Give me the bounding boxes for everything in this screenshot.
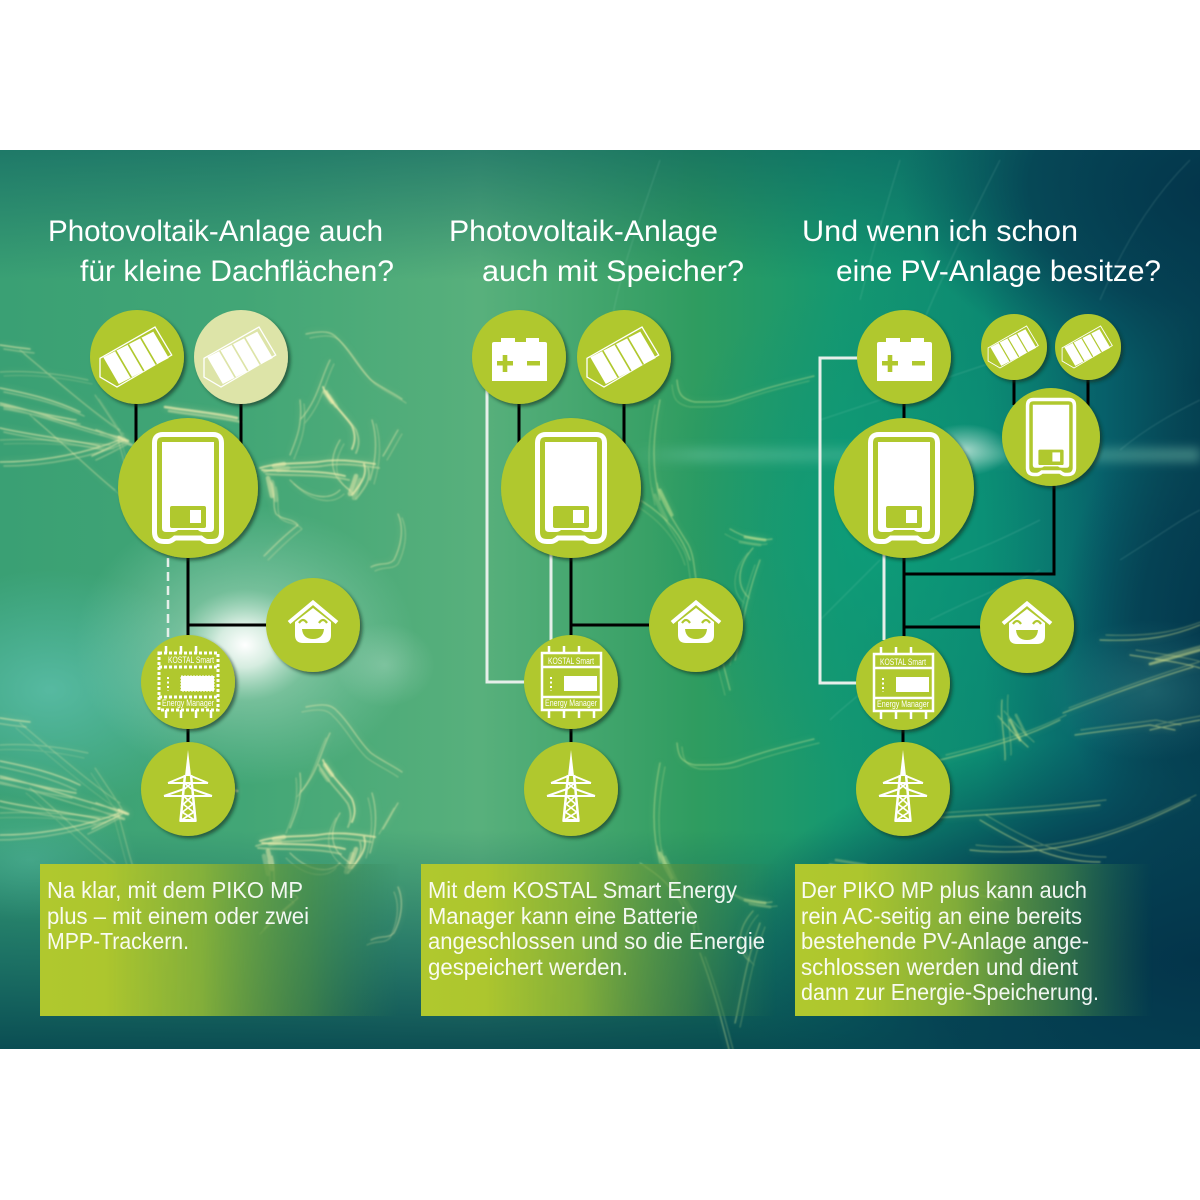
icon: battery — [472, 310, 566, 404]
icon: small existing inverter — [1002, 388, 1100, 486]
icon: optional energy manager: Energy Manager — [162, 698, 214, 708]
text box: column 3: Der PIKO MP plus kann auch — [801, 877, 1087, 903]
heading: column 2 — [449, 215, 744, 288]
icon: happy home — [649, 578, 743, 672]
icon: small solar panel A — [981, 314, 1047, 380]
light wisps — [0, 160, 1200, 1057]
text box: column 1: Na klar, mit dem PIKO MP — [47, 877, 303, 903]
icon: battery — [857, 310, 951, 404]
icon: solar panel — [90, 310, 184, 404]
icon: energy manager — [524, 635, 618, 729]
icon: inverter — [118, 418, 258, 558]
icon: happy home — [266, 578, 360, 672]
text box: column 3: schlossen werden und dient — [801, 954, 1079, 980]
icon: small solar panel B — [1055, 314, 1121, 380]
diagram: column 2 — [472, 310, 743, 836]
icon: power pylon — [141, 742, 235, 836]
connectors column 3 — [820, 358, 1088, 745]
diagram: column 1 — [90, 310, 360, 836]
icon: energy manager: Energy Manager — [877, 699, 929, 709]
text box: column 1: MPP-Trackern. — [47, 928, 189, 954]
diagram: column 3 — [820, 310, 1121, 836]
icon: energy manager: KOSTAL Smart — [548, 656, 594, 666]
heading: column 3: eine PV-Anlage besitze? — [836, 255, 1161, 288]
heading: column 2: Photovoltaik-Anlage — [449, 215, 718, 248]
icon: energy manager — [856, 636, 950, 730]
icon: optional energy manager — [141, 635, 235, 729]
icon: inverter — [834, 418, 974, 558]
icon: power pylon — [524, 742, 618, 836]
icon: solar panel — [577, 310, 671, 404]
icon: energy manager: KOSTAL Smart — [880, 657, 926, 667]
icon: inverter — [501, 418, 641, 558]
heading: column 2: auch mit Speicher? — [482, 255, 744, 288]
heading: column 1 — [48, 215, 394, 288]
text box: column 3: dann zur Energie-Speicherung. — [801, 979, 1099, 1005]
text box: column 3: rein AC-seitig an eine bereits — [801, 903, 1082, 929]
icon: power pylon — [856, 742, 950, 836]
icon: optional solar panel — [194, 310, 288, 404]
heading: column 1: für kleine Dachflächen? — [80, 255, 394, 288]
icon: energy manager: Energy Manager — [545, 698, 597, 708]
icon: optional energy manager: KOSTAL Smart — [168, 655, 214, 665]
text box: column 3: bestehende PV-Anlage ange- — [801, 928, 1089, 954]
text box: column 2: gespeichert werden. — [428, 954, 628, 980]
connectors column 2 — [487, 385, 650, 745]
text box: column 2: angeschlossen und so die Energie — [428, 928, 765, 954]
text box: column 2: Mit dem KOSTAL Smart Energy — [428, 877, 737, 903]
connectors column 1 — [136, 400, 270, 745]
text box: column 1: plus – mit einem oder zwei — [47, 903, 309, 929]
soft wisp halo — [0, 346, 1200, 905]
text box: column 3 — [795, 864, 1153, 1016]
text box: column 1 — [40, 864, 400, 1016]
heading: column 1: Photovoltaik-Anlage auch — [48, 215, 383, 248]
icon: happy home — [980, 579, 1074, 673]
heading: column 3 — [802, 215, 1161, 288]
background panel — [0, 150, 1200, 1049]
heading: column 3: Und wenn ich schon — [802, 215, 1078, 248]
text box: column 2 — [421, 864, 777, 1016]
text box: column 2: Manager kann eine Batterie — [428, 903, 698, 929]
